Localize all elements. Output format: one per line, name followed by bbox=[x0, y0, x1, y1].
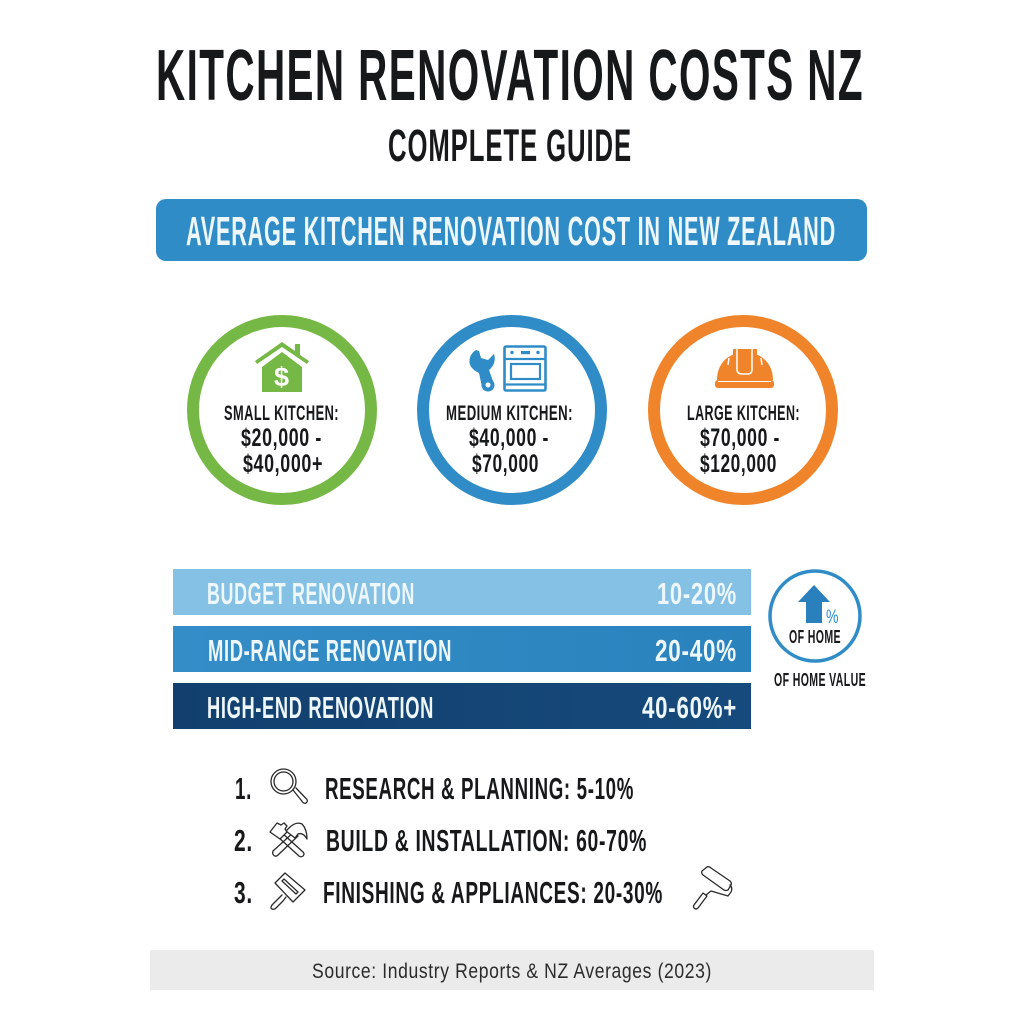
panel: medium kitchen bbox=[423, 321, 601, 499]
callout: percent of home value bbox=[770, 571, 866, 690]
icon: magnifier bbox=[271, 769, 307, 803]
bar: high-end renovation: HIGH-END RENOVATION bbox=[207, 690, 434, 725]
step 3: finishing and appliances: FINISHING & APPLIANCES: 20-30% bbox=[323, 875, 663, 910]
icon: paint brush bbox=[271, 873, 305, 909]
icon: house with dollar bbox=[255, 342, 309, 392]
callout: percent of home value: % bbox=[826, 607, 839, 628]
panel: large kitchen: $70,000 - bbox=[700, 424, 780, 452]
panel: large kitchen: LARGE KITCHEN: bbox=[687, 402, 800, 425]
bar: mid-range renovation bbox=[173, 626, 751, 672]
icon: up arrow bbox=[798, 585, 830, 623]
callout: percent of home value: OF HOME VALUE bbox=[774, 670, 866, 690]
panel: small kitchen: $40,000+ bbox=[243, 450, 323, 478]
step 2: build and installation bbox=[234, 823, 647, 858]
bar: budget renovation: 10-20% bbox=[657, 576, 737, 611]
bar: mid-range renovation: MID-RANGE RENOVATION bbox=[208, 633, 452, 668]
step 3: finishing and appliances: 3. bbox=[234, 875, 253, 910]
icon: crossed hammers bbox=[270, 823, 307, 857]
source footer: Source: Industry Reports & NZ Averages (2023) bbox=[312, 960, 712, 983]
step 3: finishing and appliances bbox=[234, 867, 732, 910]
icon: house with dollar: $ bbox=[274, 362, 290, 392]
step 1: research and planning: RESEARCH & PLANNING: 5-10% bbox=[325, 771, 634, 806]
step 2: build and installation: BUILD & INSTALLATION: 60-70% bbox=[326, 823, 647, 858]
panel: large kitchen: $120,000 bbox=[700, 450, 777, 478]
icon: paint roller bbox=[694, 867, 732, 909]
panel: small kitchen bbox=[193, 321, 371, 499]
panel: medium kitchen: $70,000 bbox=[472, 450, 539, 478]
step 1: research and planning: 1. bbox=[235, 771, 252, 806]
panel: medium kitchen: MEDIUM KITCHEN: bbox=[446, 402, 573, 425]
icon: hard hat bbox=[715, 349, 774, 388]
step 1: research and planning bbox=[235, 769, 634, 806]
panel: small kitchen: $20,000 - bbox=[241, 424, 322, 452]
bar: budget renovation: BUDGET RENOVATION bbox=[207, 576, 415, 611]
bar: high-end renovation bbox=[173, 683, 751, 729]
subtitle: COMPLETE GUIDE bbox=[388, 120, 632, 171]
bar: mid-range renovation: 20-40% bbox=[655, 633, 737, 668]
panel: medium kitchen: $40,000 - bbox=[469, 424, 549, 452]
callout: percent of home value: OF HOME bbox=[789, 627, 841, 647]
icon: oven bbox=[504, 346, 546, 390]
icon: wrench bbox=[469, 350, 495, 392]
bar: high-end renovation: 40-60%+ bbox=[642, 690, 737, 725]
step 2: build and installation: 2. bbox=[234, 823, 253, 858]
panel: large kitchen bbox=[654, 321, 832, 499]
source footer bbox=[150, 950, 874, 990]
bar: budget renovation bbox=[173, 569, 751, 615]
panel: small kitchen: SMALL KITCHEN: bbox=[224, 402, 339, 425]
banner bbox=[156, 199, 867, 261]
